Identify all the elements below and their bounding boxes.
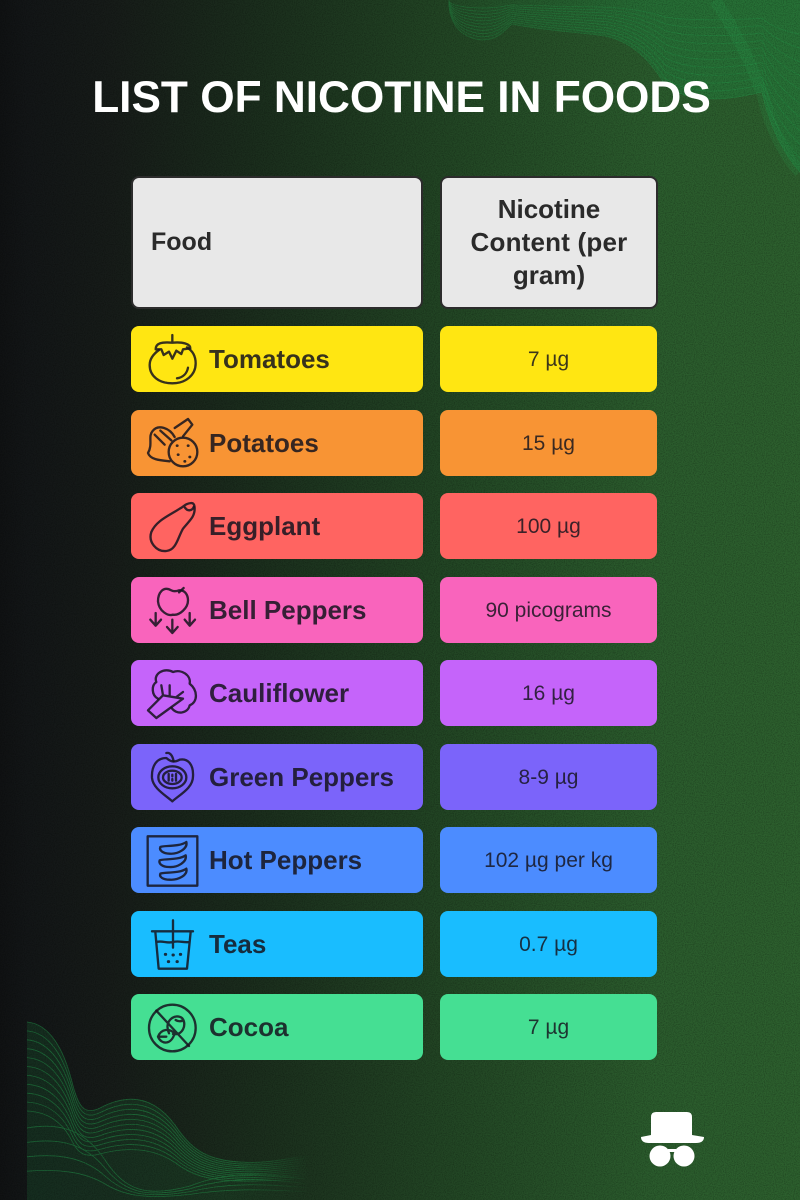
icon: green pepper bbox=[150, 752, 194, 802]
title: LIST OF NICOTINE IN FOODS bbox=[92, 73, 711, 122]
row: hot peppers: Hot Peppers bbox=[209, 844, 362, 874]
icon: bell pepper bbox=[149, 586, 196, 634]
value: potatoes: 15 µg bbox=[522, 432, 575, 455]
table header: food: Food bbox=[151, 228, 212, 256]
value: eggplant bbox=[440, 493, 657, 559]
row: green peppers: Green Peppers bbox=[209, 762, 394, 792]
table header: nicotine content: Content (per bbox=[471, 227, 627, 257]
value: eggplant: 100 µg bbox=[516, 515, 581, 538]
table header: nicotine content bbox=[440, 176, 658, 309]
row: eggplant: Eggplant bbox=[209, 510, 320, 540]
row: potatoes bbox=[131, 410, 423, 476]
table header: food bbox=[131, 176, 423, 309]
value: teas bbox=[440, 911, 657, 977]
value: teas: 0.7 µg bbox=[519, 933, 578, 956]
icon: bubble tea bbox=[150, 919, 194, 970]
value: bell peppers bbox=[440, 577, 657, 643]
icon: potato bbox=[146, 418, 198, 468]
row: bell peppers bbox=[131, 577, 423, 643]
table header: nicotine content: Nicotine bbox=[498, 194, 600, 224]
row: teas bbox=[131, 911, 423, 977]
row: cauliflower: Cauliflower bbox=[209, 678, 349, 708]
logo: hat and glasses bbox=[641, 1112, 704, 1166]
icon: cauliflower bbox=[146, 669, 198, 720]
icon: tomato bbox=[148, 334, 197, 384]
row: tomatoes bbox=[131, 326, 423, 392]
value: bell peppers: 90 picograms bbox=[485, 599, 612, 622]
value: cauliflower bbox=[440, 660, 657, 726]
row: cocoa: Cocoa bbox=[209, 1012, 288, 1042]
row: teas: Teas bbox=[209, 928, 266, 958]
value: tomatoes bbox=[440, 326, 657, 392]
row: hot peppers bbox=[131, 827, 423, 893]
row: cocoa bbox=[131, 994, 423, 1060]
value: green peppers: 8-9 µg bbox=[519, 766, 578, 789]
row: cauliflower bbox=[131, 660, 423, 726]
value: cocoa: 7 µg bbox=[528, 1016, 569, 1039]
row: potatoes: Potatoes bbox=[209, 428, 319, 458]
table header: nicotine content: gram) bbox=[513, 260, 585, 290]
icon: cocoa crossed out bbox=[148, 1004, 197, 1052]
row: eggplant bbox=[131, 493, 423, 559]
row: green peppers bbox=[131, 744, 423, 810]
icon: eggplant bbox=[149, 502, 196, 552]
row: bell peppers: Bell Peppers bbox=[209, 594, 367, 624]
value: potatoes bbox=[440, 410, 657, 476]
value: green peppers bbox=[440, 744, 657, 810]
icon: hot peppers bbox=[146, 835, 198, 887]
value: tomatoes: 7 µg bbox=[528, 348, 569, 371]
value: hot peppers: 102 µg per kg bbox=[484, 849, 613, 872]
value: hot peppers bbox=[440, 827, 657, 893]
value: cocoa bbox=[440, 994, 657, 1060]
value: cauliflower: 16 µg bbox=[522, 682, 575, 705]
row: tomatoes: Tomatoes bbox=[209, 344, 330, 374]
